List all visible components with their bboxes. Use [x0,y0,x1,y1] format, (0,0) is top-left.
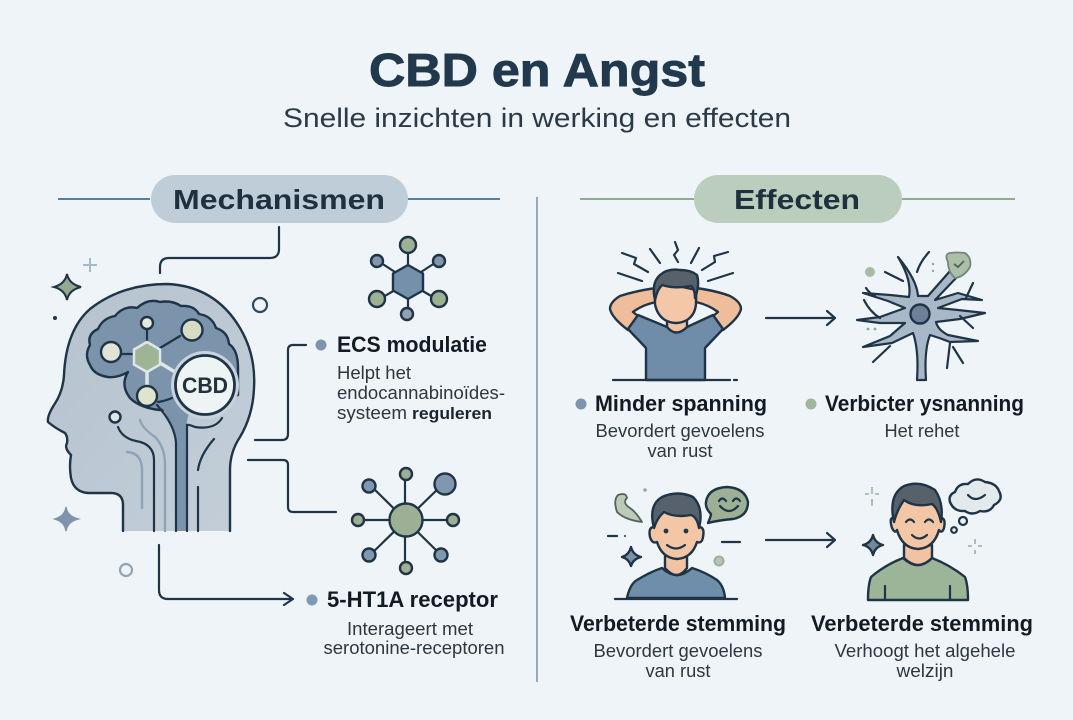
connector: heading to head [160,227,279,273]
label: 5-HT1A receptor [306,587,504,658]
label: ECS modulatie: endocannabinoïdes- [337,383,505,403]
connector: head to ECS modulatie [255,345,306,440]
head silhouette [48,284,254,531]
label: Verbeterde stemming left [570,611,786,681]
connector: head to receptor molecule [248,460,336,512]
illustration: neuron [857,252,985,380]
decorative sparkles left [53,258,267,576]
arrow: tense to neuron top [766,311,835,325]
label: Verbeterde stemming right: welzijn [895,661,954,681]
label: Verbeterde stemming left: van rust [646,661,710,681]
label: ECS modulatie [316,332,505,423]
heading: Effecten: Effecten [734,184,860,215]
label: Verbiter ysnanning: Het rehet [884,421,960,441]
stress lines [618,242,733,281]
subtitle: Snelle inzichten in werking en effecten [283,103,791,133]
label: 5-HT1A receptor: 5-HT1A receptor [327,587,498,612]
icon: ECS molecule [369,237,447,320]
label: ECS modulatie: Helpt het [337,363,411,383]
neuron body with tapered arms [857,257,985,380]
brain [87,301,238,410]
illustration: head with brain and CBD: CBD [182,373,228,398]
illustration: happy person with thought cloud [863,479,1001,600]
molecule in brain [147,355,175,396]
neuron branches [864,252,973,368]
label: Verbiter ysnanning [806,391,1024,441]
label: ECS modulatie: systeem [337,403,407,423]
illustration: tense person [610,242,741,380]
label: Verbeterde stemming right [811,611,1033,681]
arrow: mood to mood [766,533,835,547]
label: Verbeterde stemming left: Verbeterde stemming [570,611,786,636]
arrow: head to 5-HT1A receptor [159,545,293,605]
face [655,282,696,323]
label: ECS modulatie: ECS modulatie [337,332,487,357]
CBD badge [171,351,239,419]
nerve lines [118,427,214,531]
center divider [536,197,538,682]
label: Verbiter ysnanning: Verbicter ysnanning [825,391,1024,416]
label: Minder spanning: Bevordert gevoelens [596,421,764,441]
hair [654,270,698,300]
label: Minder spanning: van rust [648,441,712,461]
label: ECS modulatie: reguleren [412,404,492,423]
label: Minder spanning [576,391,767,461]
icon: receptor molecule [352,468,459,574]
label: Minder spanning: Minder spanning [595,391,767,416]
shirt [628,315,723,380]
label: Verbeterde stemming right: Verbeterde stemming [811,611,1033,636]
label: Verbeterde stemming right: Verhoogt het algehele [834,641,1016,661]
neck [667,312,687,332]
heading: Effecten [580,175,1015,223]
illustration: head with brain and CBD [48,284,254,531]
title: CBD en Angst [369,44,705,96]
label: 5-HT1A receptor: Interageert met [347,619,473,639]
heading: Mechanismen: Mechanismen [173,184,385,215]
arms [610,288,656,330]
label: 5-HT1A receptor: serotonine-receptoren [324,638,504,658]
heading: Mechanismen [58,175,500,223]
illustration: smiling person with speech bubble [608,487,748,599]
label: Verbeterde stemming left: Bevordert gevoelens [594,641,762,661]
